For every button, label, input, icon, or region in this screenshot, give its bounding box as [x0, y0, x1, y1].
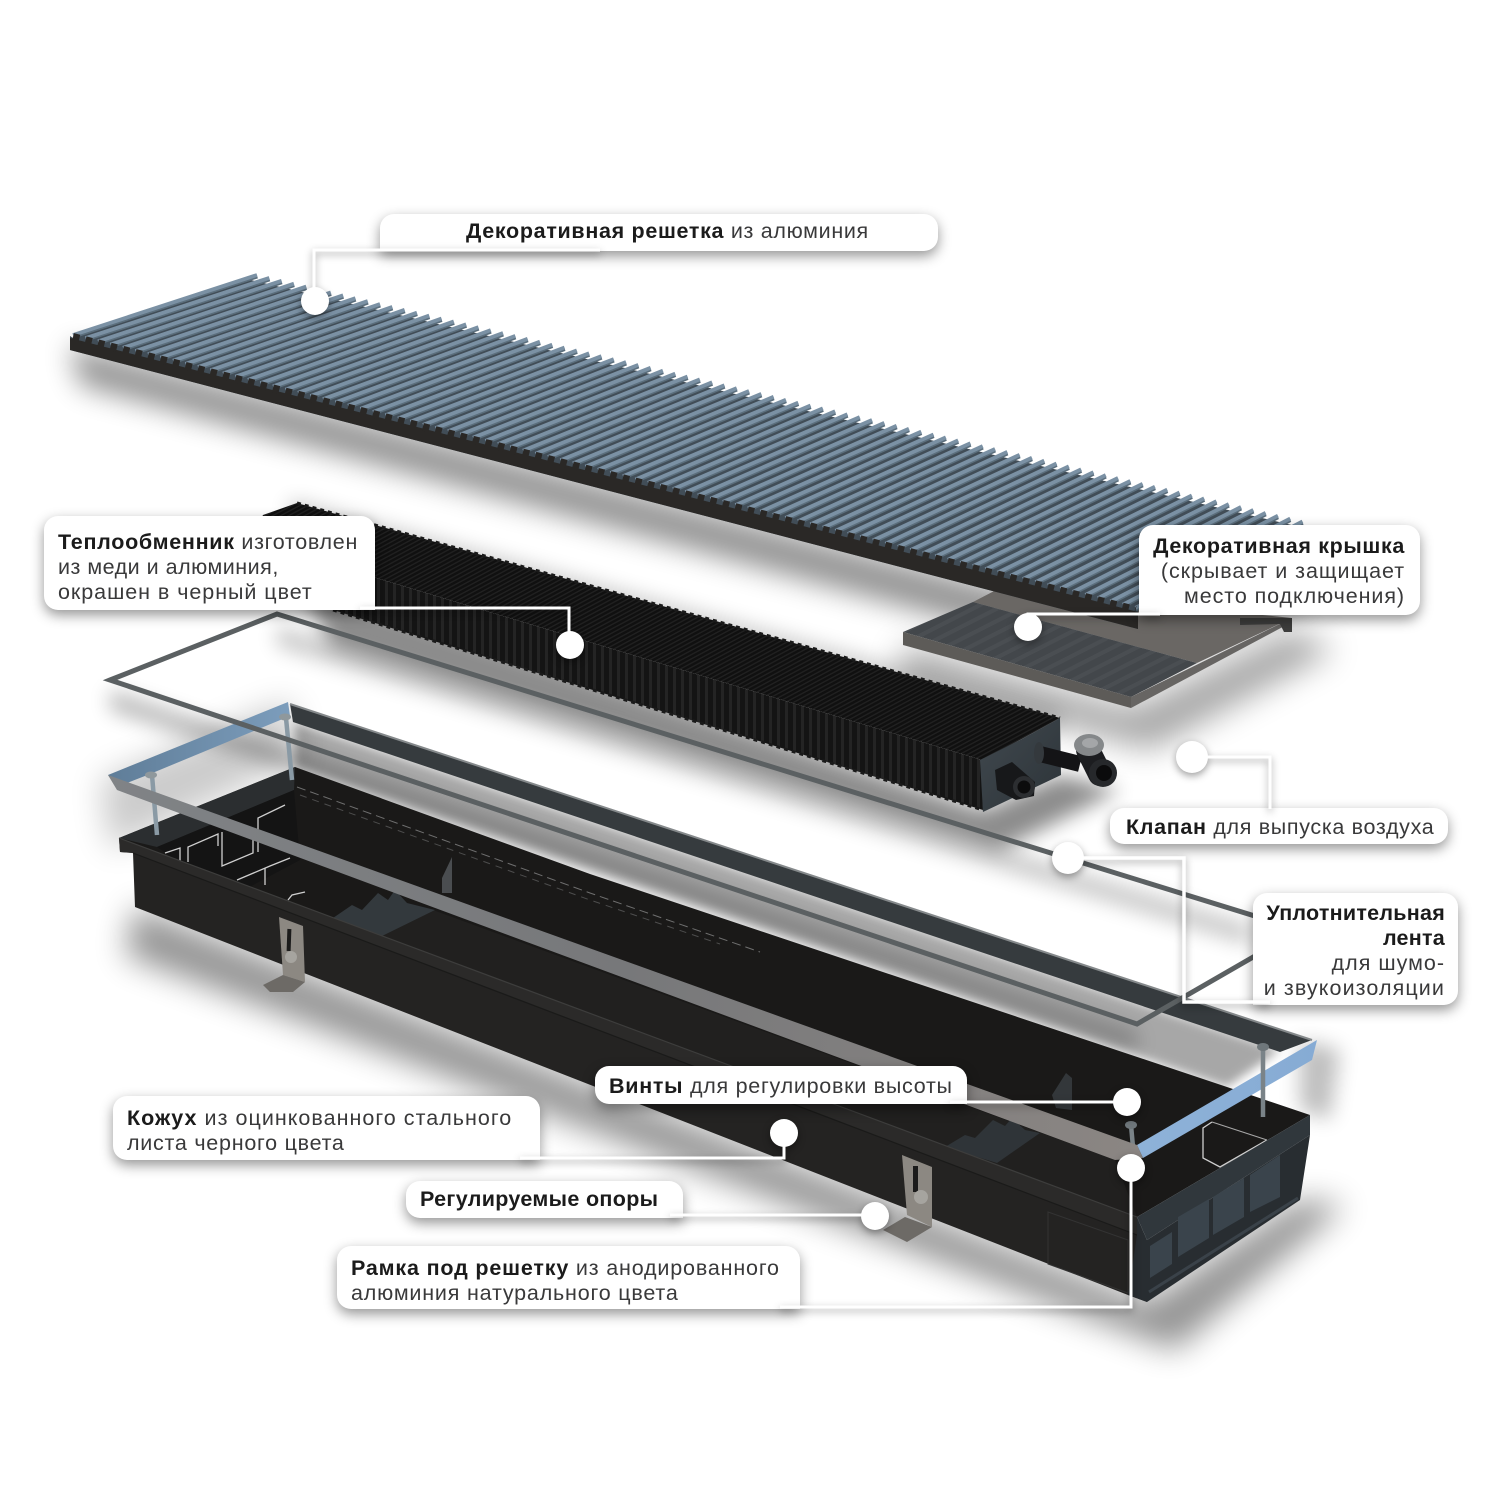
- callout: decorative lid: Декоративная крышка: [1153, 534, 1405, 558]
- callout: sealing tape: для шумо-: [1332, 951, 1445, 975]
- right short blue band: [1137, 1040, 1317, 1158]
- callout: sealing tape: Уплотнительная: [1266, 901, 1445, 925]
- left foot bracket: [263, 917, 305, 992]
- service hatch outline: [1048, 1212, 1128, 1293]
- T valve body: [1088, 750, 1100, 774]
- stepped inner plate right: [945, 1118, 1040, 1163]
- end plate: [980, 718, 1061, 812]
- callout: height screws: [595, 1066, 967, 1104]
- dark lower band: [70, 338, 1138, 629]
- left short blue band: [108, 702, 290, 787]
- callout: decorative lid: (скрывает и защищает: [1161, 559, 1405, 583]
- callout: air valve: [1110, 808, 1448, 844]
- front wall rim: [119, 838, 1137, 1235]
- callout: heat exchanger: окрашен в черный цвет: [58, 580, 313, 604]
- callout: height screws: Винты для регулировки высоты: [609, 1074, 953, 1098]
- callout: casing: Кожух из оцинкованного стального: [127, 1106, 512, 1130]
- leader: sealing tape: [1052, 842, 1270, 1002]
- grille base: [70, 280, 1296, 629]
- callout: decorative grille: [380, 214, 938, 251]
- callout: grille frame: [337, 1246, 800, 1309]
- callout: decorative lid: [1139, 525, 1420, 615]
- back long band: [290, 704, 1312, 1052]
- stepped inner plate left: [333, 890, 435, 937]
- box interior: [119, 767, 1310, 1217]
- callout: heat exchanger: Теплообменник изготовлен: [58, 530, 358, 554]
- callout: adjustable supports: Регулируемые опоры: [420, 1187, 658, 1211]
- callout: grille frame: Рамка под решетку из анодированного: [351, 1256, 780, 1280]
- sealing tape outline: [110, 614, 1300, 1024]
- perforation lines right: [1203, 1122, 1267, 1167]
- bar top faces: [73, 275, 1302, 608]
- aluminium decorative grille: [70, 275, 1303, 629]
- leader: height screws: [950, 1088, 1141, 1116]
- leader: air valve: [1176, 741, 1270, 809]
- callout: decorative lid: место подключения): [1184, 584, 1405, 608]
- soft drop shadows: [70, 345, 1345, 1350]
- front long aluminium band: [108, 775, 1143, 1160]
- fins top face: [250, 503, 1060, 760]
- bar side faces: [74, 277, 1303, 610]
- frame for the grille with height screws: [108, 702, 1317, 1160]
- perforation lines left: [165, 805, 305, 900]
- right end panel: [1128, 1135, 1310, 1302]
- leader: decorative grille: [301, 250, 600, 315]
- heat exchanger: [250, 503, 1117, 812]
- leader: decorative lid: [1014, 613, 1160, 641]
- callout: sealing tape: [1253, 893, 1458, 1005]
- screw heads: [145, 714, 1269, 1129]
- callout: heat exchanger: из меди и алюминия,: [58, 555, 279, 579]
- sawtooth bar ends: [73, 337, 1136, 610]
- callout: sealing tape: лента: [1383, 926, 1445, 950]
- leader: adjustable supports: [670, 1202, 889, 1230]
- casing box: [119, 767, 1310, 1302]
- lid striped front portion: [903, 602, 1197, 697]
- callout: adjustable supports: [406, 1181, 683, 1218]
- dashed seam on back wall: [297, 787, 760, 952]
- lid lip: [903, 632, 1131, 708]
- callout: air valve: Клапан для выпуска воздуха: [1126, 815, 1434, 839]
- leader: heat exchanger: [360, 608, 584, 659]
- interior floor near front wall: [333, 910, 1137, 1217]
- left inner end wall: [119, 767, 295, 847]
- end windows: [1150, 1155, 1280, 1278]
- callout: heat exchanger: [44, 516, 375, 610]
- front wall: [119, 838, 1147, 1302]
- pipe to valve: [1040, 754, 1080, 764]
- callout: decorative grille: Декоративная решетка из алюминия: [466, 219, 869, 243]
- lid back portion: [973, 588, 1292, 663]
- right end rim: [1137, 1115, 1310, 1240]
- serrated edges: [297, 503, 1060, 718]
- air valve cap: [1074, 734, 1104, 756]
- right foot bracket: [883, 1155, 932, 1242]
- fins front face: [250, 540, 983, 810]
- leader: casing: [520, 1119, 798, 1158]
- callout: casing: листа черного цвета: [127, 1131, 345, 1155]
- leader: grille frame: [780, 1154, 1145, 1307]
- callout: sealing tape: и звукоизоляции: [1264, 976, 1445, 1000]
- front nut: [995, 762, 1035, 800]
- decorative lid: [903, 588, 1292, 708]
- callout: casing: [113, 1096, 540, 1160]
- rods: [152, 718, 1263, 1147]
- callout: grille frame: алюминия натурального цвета: [351, 1281, 679, 1305]
